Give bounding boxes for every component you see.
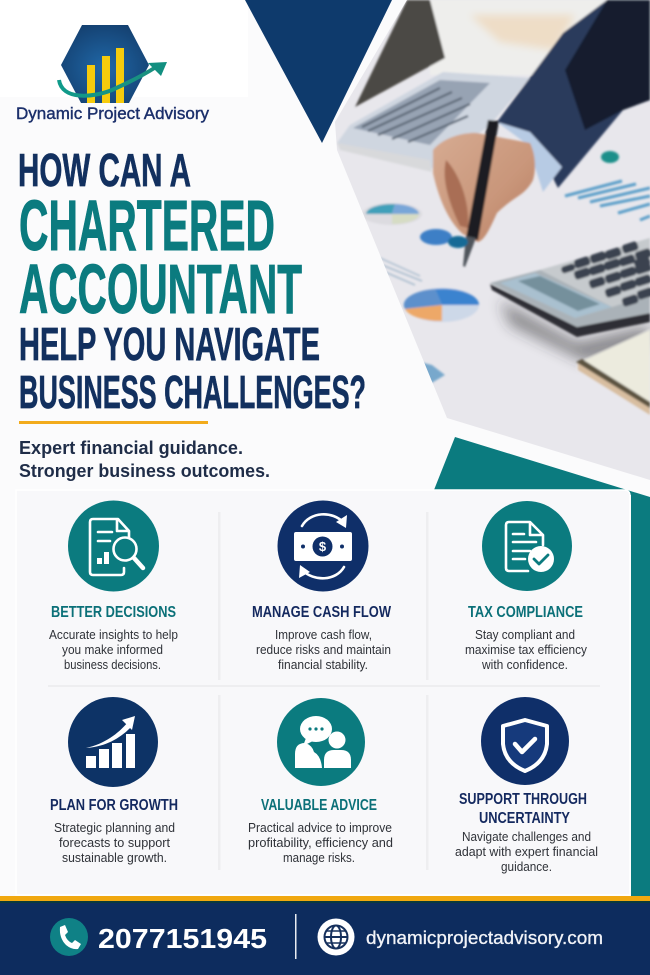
card: better decisions: business decisions. <box>64 658 161 672</box>
card: manage cash flow: $ <box>319 539 327 554</box>
card: support through uncertainty: Navigate challenges and <box>462 830 591 844</box>
card: manage cash flow: Improve cash flow, <box>275 628 372 642</box>
card: tax compliance: maximise tax efficiency <box>465 643 588 657</box>
panel: services grid <box>16 490 630 895</box>
card: support through uncertainty: guidance. <box>501 860 552 874</box>
card: plan for growth: PLAN FOR GROWTH <box>50 797 178 814</box>
card: better decisions: Accurate insights to help <box>49 628 178 642</box>
title: ACCOUNTANT <box>19 250 302 328</box>
logo wordmark: Dynamic Project Advisory <box>16 104 209 123</box>
title: CHARTERED <box>19 187 275 266</box>
card: tax compliance: Stay compliant and <box>475 628 575 642</box>
card: valuable advice: Practical advice to improve <box>248 821 392 835</box>
card: better decisions: BETTER DECISIONS <box>51 604 176 621</box>
card: valuable advice <box>248 698 393 865</box>
card: manage cash flow: reduce risks and maintain <box>256 643 391 657</box>
title: BUSINESS CHALLENGES? <box>19 366 366 418</box>
photo: accountant working at desk <box>330 0 650 490</box>
card: manage cash flow: financial stability. <box>278 658 368 672</box>
card: plan for growth <box>50 697 178 865</box>
card: plan for growth: forecasts to support <box>59 836 171 850</box>
card: support through uncertainty <box>455 697 598 874</box>
card: better decisions <box>49 500 178 672</box>
card: tax compliance: TAX COMPLIANCE <box>468 604 583 621</box>
title: HOW CAN A <box>18 144 191 196</box>
icon: globe <box>318 918 354 956</box>
navy triangle <box>245 0 392 143</box>
subheading <box>19 437 270 481</box>
card: manage cash flow: MANAGE CASH FLOW <box>252 604 392 621</box>
icon: phone <box>50 918 88 956</box>
card: support through uncertainty: SUPPORT THROUGH <box>459 791 587 808</box>
phone number: 2077151945 <box>98 923 267 954</box>
card: valuable advice: manage risks. <box>283 851 355 865</box>
card: support through uncertainty: adapt with expert financial <box>455 845 598 859</box>
logo <box>16 25 209 123</box>
footer contact bar <box>0 896 650 975</box>
subheading: Expert financial guidance. <box>19 437 243 458</box>
card: tax compliance: with confidence. <box>481 658 568 672</box>
subheading: Stronger business outcomes. <box>19 460 270 481</box>
teal accent shape <box>432 437 650 896</box>
card: support through uncertainty: UNCERTAINTY <box>479 810 570 827</box>
gold title underline <box>19 421 208 424</box>
card: plan for growth: sustainable growth. <box>62 851 167 865</box>
title <box>18 144 366 418</box>
card: valuable advice: VALUABLE ADVICE <box>261 797 377 814</box>
card: valuable advice: profitability, efficiency and <box>248 836 393 850</box>
title: HELP YOU NAVIGATE <box>19 318 320 370</box>
website: dynamicprojectadvisory.com <box>366 928 603 948</box>
card: plan for growth: Strategic planning and <box>54 821 175 835</box>
card: tax compliance <box>465 501 588 672</box>
card: manage cash flow <box>252 500 392 672</box>
contact divider <box>295 914 296 959</box>
card: better decisions: you make informed <box>62 643 163 657</box>
